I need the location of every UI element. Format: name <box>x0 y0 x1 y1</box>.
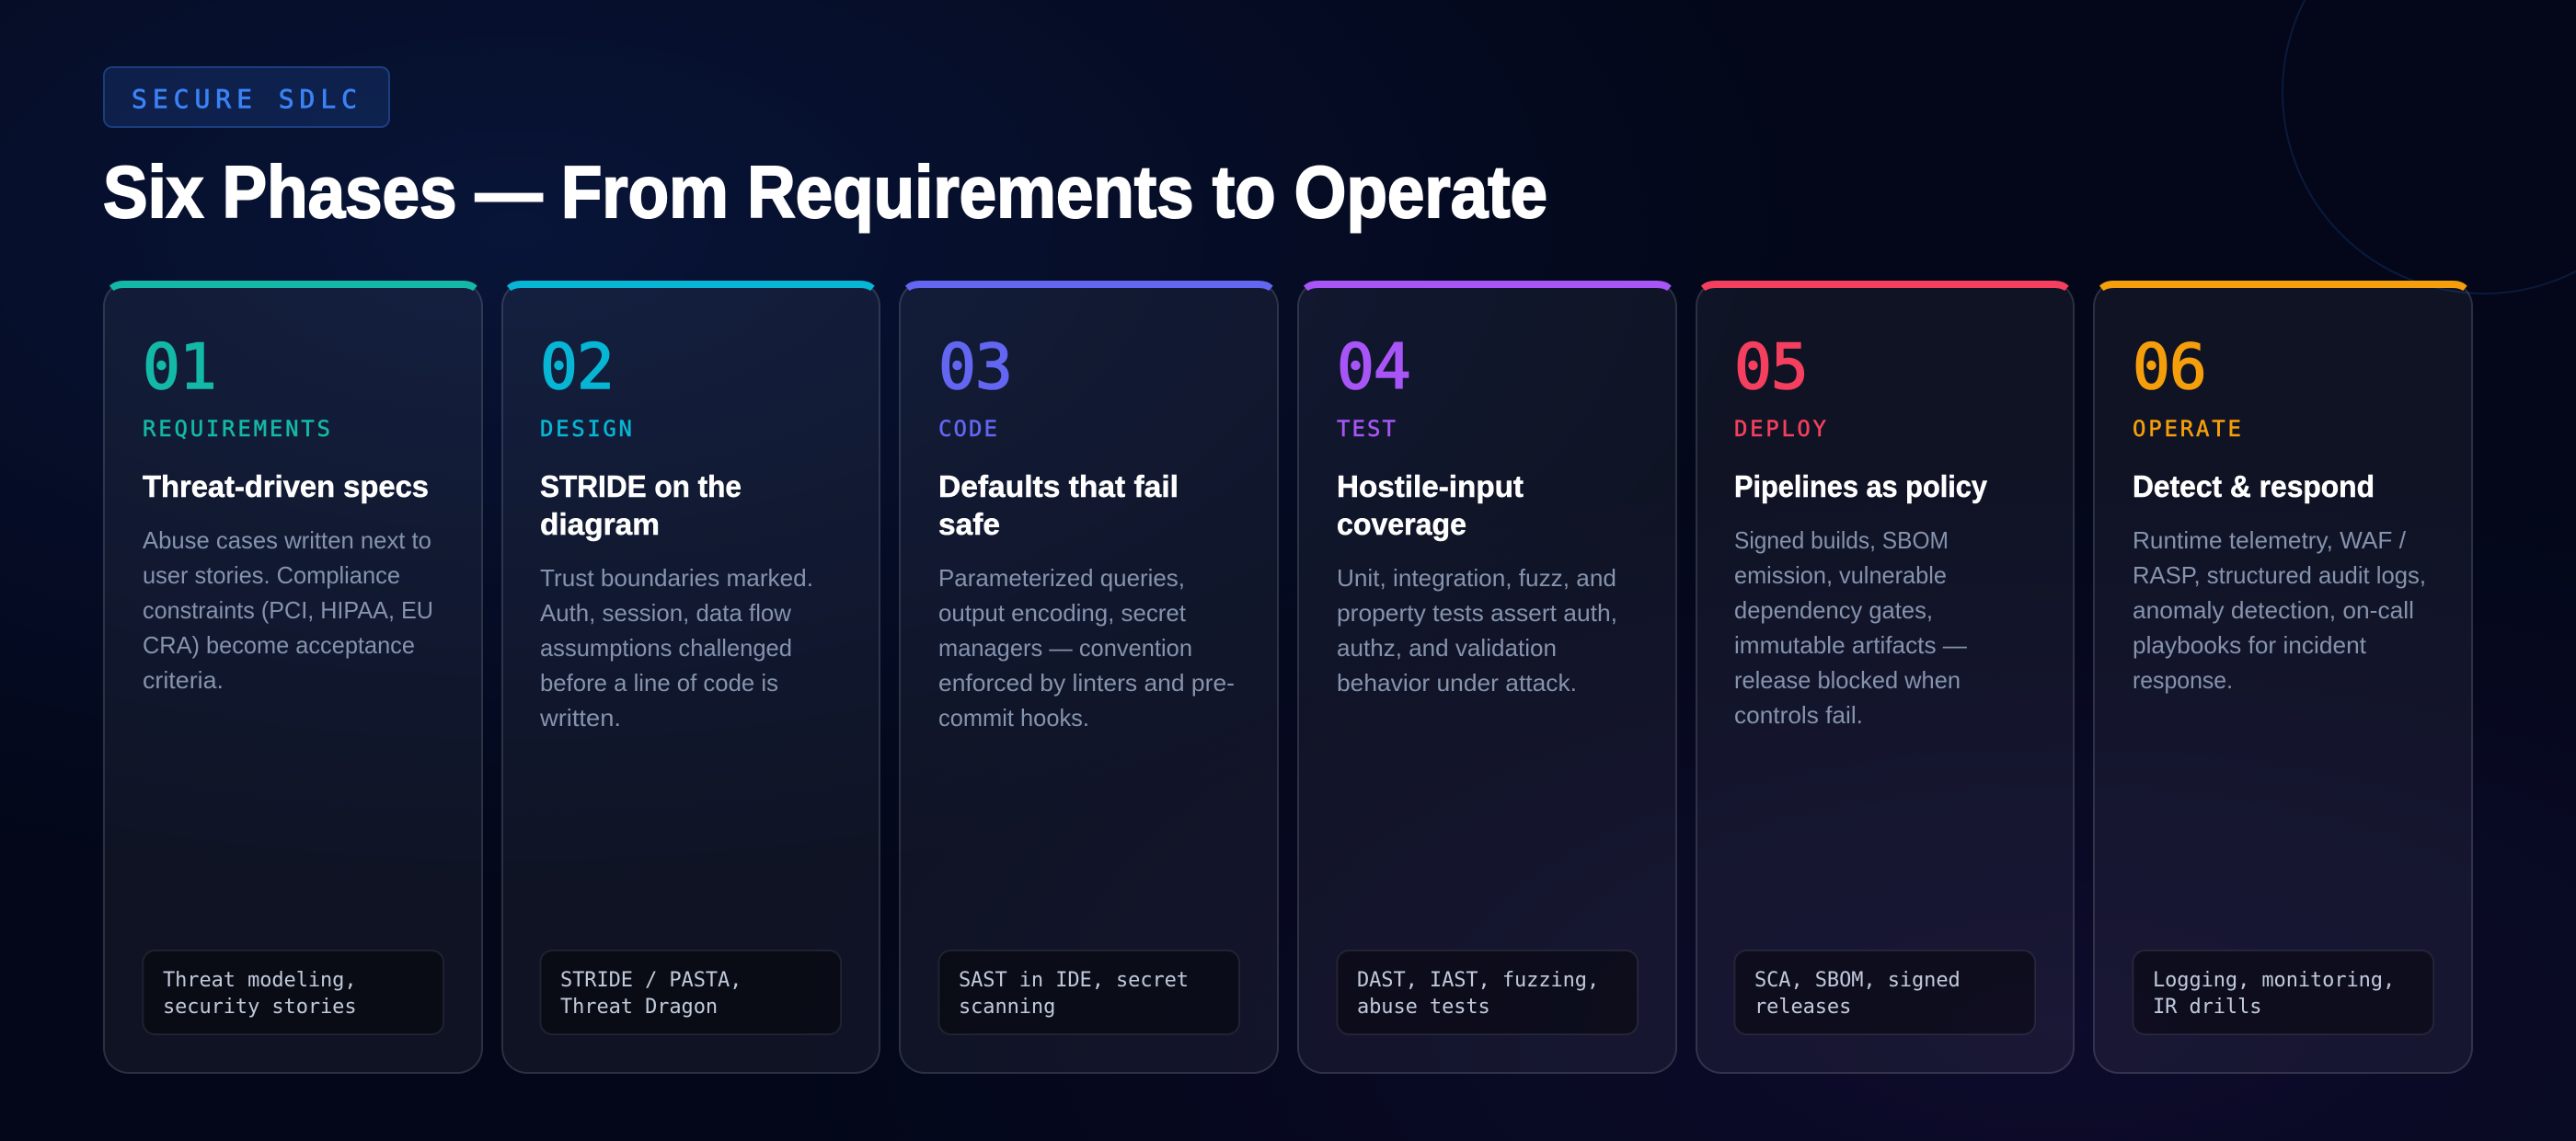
tools box <box>1735 951 2035 1034</box>
card heading: Pipelines as policy <box>1734 469 1988 503</box>
description <box>142 526 432 694</box>
description: anomaly detection, on-call <box>2133 596 2414 624</box>
description: playbooks for incident <box>2133 631 2367 659</box>
card heading <box>938 469 1179 541</box>
description: immutable artifacts — <box>1734 631 1967 659</box>
accent bar <box>1303 281 1671 291</box>
description: release blocked when <box>1734 666 1961 694</box>
accent bar <box>905 281 1273 291</box>
phase label: CODE <box>938 416 997 442</box>
description: Parameterized queries, <box>938 564 1185 592</box>
tools box: SAST in IDE, secret <box>959 969 1189 992</box>
tools box: scanning <box>959 996 1055 1019</box>
tools box <box>541 951 841 1034</box>
badge label: SECURE SDLC <box>132 84 357 114</box>
tools box <box>143 951 443 1034</box>
description: Abuse cases written next to <box>142 526 431 554</box>
description: constraints (PCI, HIPAA, EU <box>142 596 432 624</box>
tools box: security stories <box>162 996 356 1019</box>
accent bar <box>2099 281 2467 291</box>
tools box <box>1337 951 1637 1034</box>
title: Six Phases — From Requirements to Operate <box>103 151 1547 233</box>
accent bar <box>1701 281 2069 291</box>
tools box: abuse tests <box>1356 996 1489 1019</box>
phase number: 06 <box>2133 331 2206 404</box>
description: property tests assert auth, <box>1336 599 1616 627</box>
description: managers — convention <box>938 634 1192 662</box>
description: Runtime telemetry, WAF / <box>2133 526 2407 554</box>
card heading: diagram <box>540 507 660 541</box>
description <box>2133 526 2426 694</box>
accent bar <box>109 281 477 291</box>
phase number: 01 <box>142 331 215 404</box>
tools box <box>938 951 1239 1034</box>
description: response. <box>2133 666 2233 694</box>
card heading <box>1336 469 1524 541</box>
description: output encoding, secret <box>938 599 1187 627</box>
card heading: Detect & respond <box>2133 469 2375 503</box>
description: written. <box>539 704 621 732</box>
description: behavior under attack. <box>1336 669 1576 697</box>
tools box: Threat Dragon <box>560 996 718 1019</box>
description: user stories. Compliance <box>142 561 399 589</box>
phase number: 02 <box>540 331 614 404</box>
decorative ring <box>2282 0 2576 294</box>
panel: 03 code <box>899 281 1279 1074</box>
description: criteria. <box>142 666 223 694</box>
phase label: OPERATE <box>2133 416 2241 442</box>
panel: 01 requirements <box>103 281 483 1074</box>
phase label: TEST <box>1336 416 1395 442</box>
tools box: STRIDE / PASTA, <box>560 969 742 992</box>
description: commit hooks. <box>938 704 1089 732</box>
phase number: 04 <box>1336 331 1409 404</box>
description <box>539 564 813 732</box>
panel: 04 test <box>1297 281 1677 1074</box>
phase label: REQUIREMENTS <box>142 416 329 442</box>
description: Auth, session, data flow <box>540 599 791 627</box>
panel: 05 deploy <box>1696 281 2075 1074</box>
tools box <box>2133 951 2433 1034</box>
description: before a line of code is <box>540 669 778 697</box>
description <box>1336 564 1616 697</box>
accent bar <box>507 281 875 291</box>
description: RASP, structured audit logs, <box>2133 561 2426 589</box>
description: assumptions challenged <box>540 634 792 662</box>
tools box: DAST, IAST, fuzzing, <box>1356 969 1599 992</box>
description: dependency gates, <box>1734 596 1933 624</box>
tools box: Threat modeling, <box>162 969 356 992</box>
panel: 06 operate <box>2093 281 2473 1074</box>
card heading: Hostile-input <box>1336 469 1524 503</box>
card heading: Defaults that fail <box>938 469 1179 503</box>
card heading: Threat-driven specs <box>142 469 428 503</box>
description <box>938 564 1235 732</box>
description: emission, vulnerable <box>1734 561 1947 589</box>
phase number: 05 <box>1734 331 1808 404</box>
card heading: STRIDE on the <box>540 469 742 503</box>
description: controls fail. <box>1734 701 1863 729</box>
tools box: Logging, monitoring, <box>2153 969 2395 992</box>
tools box: SCA, SBOM, signed <box>1754 969 1961 992</box>
phase label: DEPLOY <box>1734 416 1826 442</box>
description: authz, and validation <box>1336 634 1556 662</box>
badge: secure sdlc <box>103 66 390 128</box>
panel: 02 design <box>501 281 880 1074</box>
description: Trust boundaries marked. <box>540 564 813 592</box>
phase number: 03 <box>938 331 1012 404</box>
card heading <box>540 469 742 541</box>
phase label: DESIGN <box>540 416 632 442</box>
description: Signed builds, SBOM <box>1734 526 1949 554</box>
card heading: coverage <box>1336 507 1466 541</box>
description: enforced by linters and pre- <box>938 669 1235 697</box>
description: Unit, integration, fuzz, and <box>1336 564 1616 592</box>
tools box: releases <box>1754 996 1851 1019</box>
tools box: IR drills <box>2153 996 2261 1019</box>
description: CRA) become acceptance <box>142 631 414 659</box>
card heading: safe <box>938 507 1000 541</box>
description <box>1734 526 1967 729</box>
